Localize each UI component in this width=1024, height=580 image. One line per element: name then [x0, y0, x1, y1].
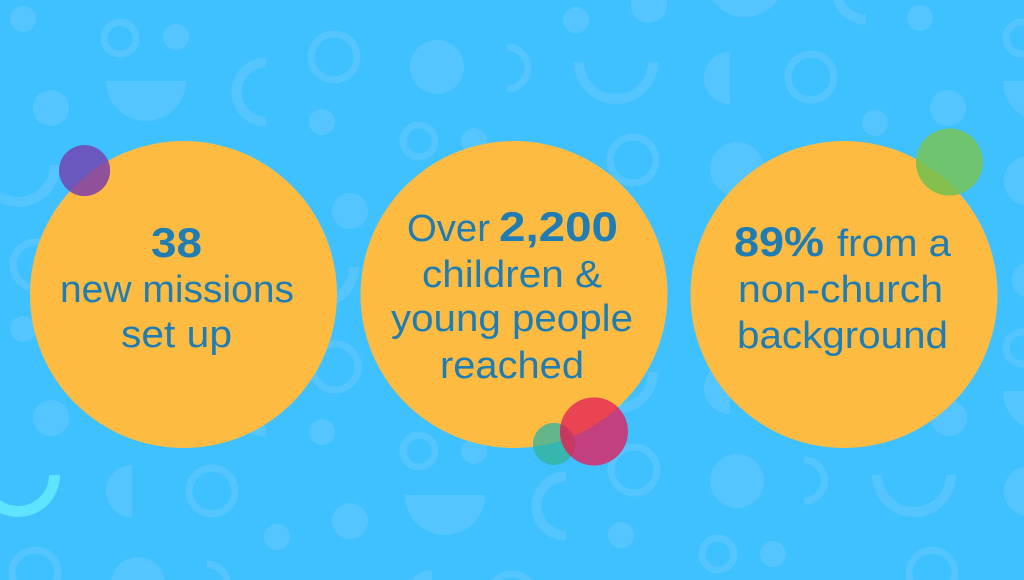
panel: 38 new missions [30, 141, 337, 448]
panel: 89% non-church background [690, 128, 998, 448]
stat: 38 new missions set up: 38 [151, 219, 202, 266]
stat: 89% from a non-church background: 89% [734, 218, 824, 265]
stat: 89% from a non-church background [734, 218, 952, 357]
stat: 38 new missions set up: new missions [60, 269, 294, 311]
stat: over 2,200 children and young people reached: children & [422, 254, 602, 296]
stat: over 2,200 children and young people reached: Over [407, 208, 490, 250]
yellow circle [690, 141, 998, 448]
stat: 89% from a non-church background: non-church [738, 269, 943, 311]
stat: 89% from a non-church background: background [737, 315, 948, 357]
stat: 89% from a non-church background: from a [837, 223, 952, 265]
purple accent dot [59, 145, 110, 196]
green accent dot [916, 128, 983, 196]
red accent dot [560, 398, 628, 466]
yellow circle [30, 141, 337, 448]
stat: over 2,200 children and young people reached: young people [391, 298, 633, 340]
panel: 2,200 children and young people [360, 141, 668, 466]
yellow circle [360, 141, 668, 448]
stat: over 2,200 children and young people reached: reached [440, 345, 584, 387]
teal accent dot [533, 423, 575, 465]
stat: over 2,200 children and young people reached: 2,200 [499, 203, 618, 250]
stat: 38 new missions set up [60, 219, 294, 356]
stat: 38 new missions set up: set up [121, 314, 232, 356]
stat: over 2,200 children and young people reached [391, 203, 633, 387]
